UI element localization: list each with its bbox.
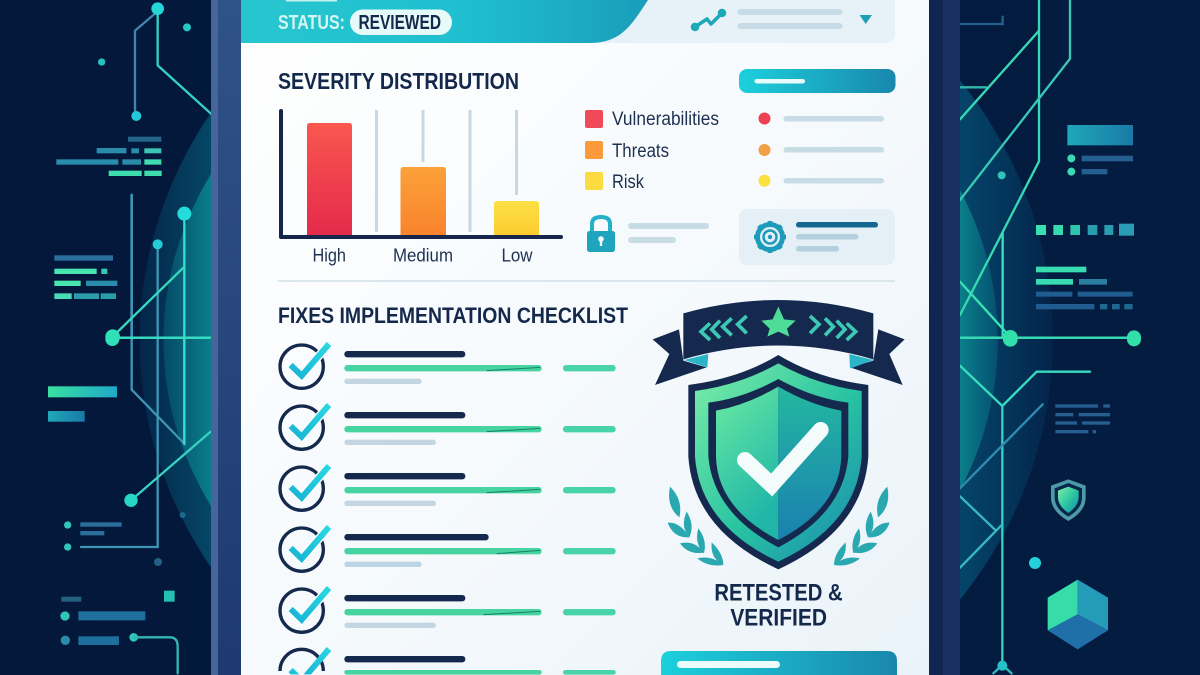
panel: header banner <box>241 0 648 43</box>
legend label: vulnerabilities: Vulnerabilities <box>612 109 719 130</box>
checklist row 6 <box>280 647 616 675</box>
icon: small shield <box>1051 479 1086 521</box>
lock text placeholder <box>628 223 709 243</box>
bar: high <box>307 123 352 236</box>
panel: right circuit decoration, top <box>960 0 1141 345</box>
status pill: REVIEWED <box>358 12 441 34</box>
panel: left circuit decoration, top <box>54 2 211 344</box>
badge label: VERIFIED <box>730 605 827 632</box>
icon: gear <box>754 221 786 253</box>
panel: gear card <box>739 209 895 265</box>
badge: retested and verified <box>653 300 905 632</box>
axis label: medium: Medium <box>393 246 453 266</box>
checklist row 1 <box>280 344 616 388</box>
axis label: high: High <box>312 246 346 266</box>
checklist row 3 <box>280 466 616 510</box>
button <box>739 69 896 93</box>
left background glow <box>140 75 240 605</box>
icon: cube <box>1048 580 1108 649</box>
panel: right circuit decoration, bottom <box>960 332 1141 673</box>
badge label: RETESTED & <box>714 580 843 607</box>
bar: low <box>494 201 539 236</box>
laurel right <box>834 487 890 565</box>
tablet frame <box>211 0 960 675</box>
bar chart: severity <box>281 110 561 266</box>
divider <box>278 280 895 282</box>
checklist <box>280 344 616 675</box>
status label: STATUS: <box>278 12 345 34</box>
legend <box>585 109 719 193</box>
heading: fixes checklist: FIXES IMPLEMENTATION CHECKLIST <box>278 303 628 328</box>
heading: severity distribution: SEVERITY DISTRIBUTION <box>278 68 519 94</box>
bottom button <box>661 651 897 675</box>
shield <box>688 355 868 569</box>
ribbon banner <box>653 300 905 385</box>
status dots list <box>758 112 884 187</box>
checklist row 4 <box>280 527 616 571</box>
legend label: threats: Threats <box>612 141 669 162</box>
icon: trend line <box>692 10 724 30</box>
panel: report page <box>241 0 929 675</box>
bar: medium <box>400 167 446 236</box>
panel: header right <box>500 0 895 43</box>
legend label: risk: Risk <box>612 172 644 193</box>
icon: lock <box>587 217 615 252</box>
checklist row 2 <box>280 405 616 449</box>
axis label: low: Low <box>502 246 533 266</box>
icon: dropdown arrow <box>860 15 872 24</box>
badge label <box>714 580 843 632</box>
checklist row 5 <box>280 588 616 632</box>
laurel left <box>668 487 723 565</box>
right background glow <box>930 47 1053 633</box>
panel: left circuit decoration, bottom <box>48 332 211 673</box>
